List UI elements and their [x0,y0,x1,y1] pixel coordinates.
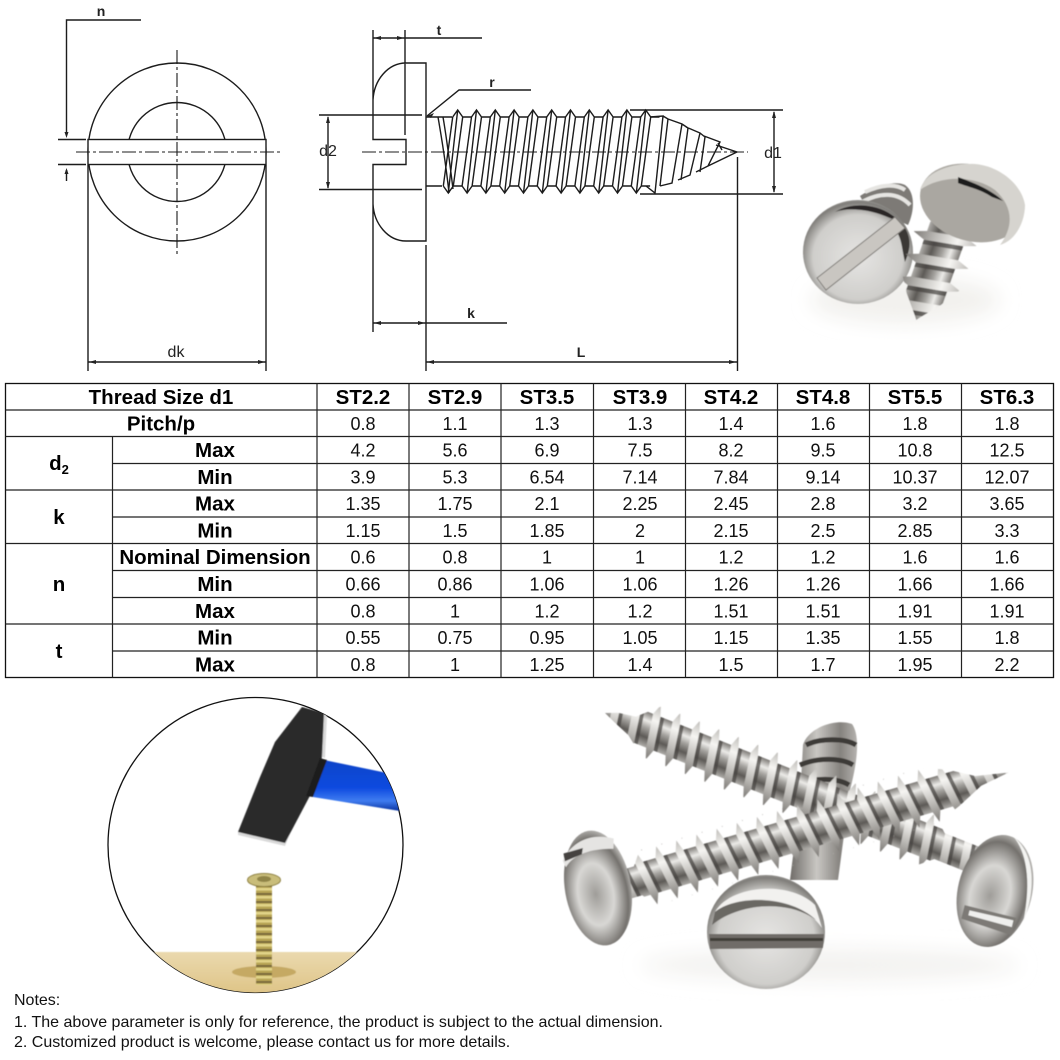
table header row: Thread Size d1 [89,386,233,409]
table values: 2.45 [713,494,749,514]
table row labels: k [53,506,65,529]
screw head [248,874,280,886]
screw head outline [373,30,426,371]
table row labels: Nominal Dimension [119,546,311,569]
table values: 1.55 [897,628,933,648]
handle [313,760,400,811]
table values: 1.15 [713,628,749,648]
table values: 1.26 [713,574,749,594]
screw shaft [256,885,272,985]
table values: 7.14 [622,468,658,488]
collar [306,758,327,797]
table values: 2.1 [534,494,560,514]
table values: 1.2 [627,602,653,622]
table row labels: d [49,452,62,475]
table values: 1.8 [994,414,1020,434]
table values: 1.75 [437,494,473,514]
table values: 1 [450,602,460,622]
table values: 1.15 [345,521,381,541]
table values: 1.6 [810,414,836,434]
table values: 10.8 [897,440,933,460]
table values: 1.35 [805,628,841,648]
label: dk: dk [168,344,185,361]
table values: 1.6 [902,548,928,568]
table row labels: Max [195,492,236,516]
table values: 2.2 [994,655,1020,675]
table header row [89,386,1034,409]
notes: 1. The above parameter is only for reference, the product is subject to the actual dimension. [14,1014,663,1031]
table values: 3.65 [989,494,1025,514]
photo: four stainless slotted screws [555,688,1045,989]
hammer silver edge [238,713,327,846]
table values: 6.54 [529,468,565,488]
front head [707,875,825,989]
label: d1: d1 [764,145,782,162]
table values: 2.15 [713,521,749,541]
table values: 8.2 [718,440,744,460]
table values: 0.8 [442,548,468,568]
table values: 1 [450,655,460,675]
table values: 1.05 [622,628,658,648]
table values: 0.66 [345,574,381,594]
rear upright screw [790,722,857,880]
screw thread [426,110,737,193]
table values: 1 [542,548,552,568]
table header row: ST6.3 [980,386,1034,409]
table values: 3.3 [994,521,1020,541]
table values: 2.25 [622,494,658,514]
table header row: ST3.5 [520,386,574,409]
table values: 1.35 [345,494,381,514]
hammer head [238,707,324,843]
rear screw shank [860,183,913,225]
right head [945,827,1045,955]
diagram: screw side view [319,22,783,371]
table values: 1.51 [713,602,749,622]
table values: 1.91 [989,602,1025,622]
table header row: ST4.2 [704,386,758,409]
table values: 1.25 [529,655,565,675]
table values: 1.3 [534,414,560,434]
notes [14,992,663,1051]
table values: 1.51 [805,602,841,622]
notes: 2. Customized product is welcome, please contact us for more details. [14,1034,510,1051]
table values: 1.91 [897,602,933,622]
table values: 1.85 [529,521,565,541]
table row labels: Max [195,439,236,462]
table values: 1.95 [897,655,933,675]
long screw to right head [595,688,987,886]
label: n: n [97,3,105,19]
table row labels: Min [197,573,233,596]
table values: 9.5 [810,440,836,460]
table values: 1.4 [718,414,744,434]
table values: 1.1 [442,414,468,434]
table values: 1.26 [805,574,841,594]
table values: 1.2 [718,548,744,568]
table values: 0.55 [345,628,381,648]
rear screw head [911,152,1033,254]
table values: 1.06 [622,574,658,594]
label: r: r [489,74,495,90]
table values: 1.8 [994,628,1020,648]
table header row: ST4.8 [796,386,850,409]
table values: 5.6 [442,440,468,460]
table values: 1.7 [810,655,836,675]
rear screw thread [886,194,987,331]
table values [345,414,1030,675]
table values: 4.2 [350,440,376,460]
table row labels: Min [197,520,233,542]
table values: 6.9 [534,440,560,460]
illustration: hammer and screw in circle [100,698,410,1002]
table: dimensions [6,384,1054,678]
table values: 1.66 [989,574,1025,594]
table header row: ST3.9 [613,386,667,409]
photo: two small slotted screws [803,152,1033,331]
table values: 1.2 [534,602,560,622]
table values: 1.4 [627,655,653,675]
table row labels: Min [197,626,233,650]
table row labels: Max [195,600,236,623]
table row labels: Max [195,654,236,676]
table values: 12.5 [989,440,1025,460]
label: L: L [577,344,586,360]
table values: 7.5 [627,440,653,460]
table values: 1 [635,548,645,568]
table values: 0.86 [437,574,473,594]
table values: 1.06 [529,574,565,594]
table values: 2.5 [810,521,836,541]
table values: 7.84 [713,468,749,488]
table values: 5.3 [442,468,468,488]
table values: 1.3 [627,414,653,434]
wood block [154,951,358,992]
table values: 1.5 [718,655,744,675]
table values: 1.5 [442,521,468,541]
table values: 2.8 [810,494,836,514]
table values: 10.37 [892,468,938,488]
table header row: ST2.9 [428,386,482,409]
table values: 0.95 [529,628,565,648]
notes: Notes: [14,992,60,1009]
long screw to left head [597,745,1017,918]
label: k: k [467,305,475,321]
table values: 0.75 [437,628,473,648]
label: t: t [437,22,442,38]
table values: 12.07 [984,468,1030,488]
table values: 2 [635,521,645,541]
table values: 2.85 [897,521,933,541]
table values: 3.9 [350,468,376,488]
table values: 0.6 [350,548,376,568]
table row labels: n [53,573,65,596]
left head [555,825,641,951]
table header row: ST2.2 [336,386,390,409]
table values: 1.6 [994,548,1020,568]
table values: 1.66 [897,574,933,594]
front screw head [803,200,913,304]
table values: 0.8 [350,414,376,434]
table row labels [49,412,311,676]
diagram: head front view [58,3,282,371]
table row labels: t [56,640,63,663]
label: d2: d2 [319,143,337,160]
table row labels: 2 [62,462,69,477]
table values: 0.8 [350,602,376,622]
table values: 1.8 [902,414,928,434]
table row labels: Pitch/p [127,412,195,436]
table values: 1.2 [810,548,836,568]
table row labels: Min [197,466,233,489]
table values: 3.2 [902,494,928,514]
table values: 9.14 [805,468,841,488]
table header row: ST5.5 [888,386,942,409]
table values: 0.8 [350,655,376,675]
